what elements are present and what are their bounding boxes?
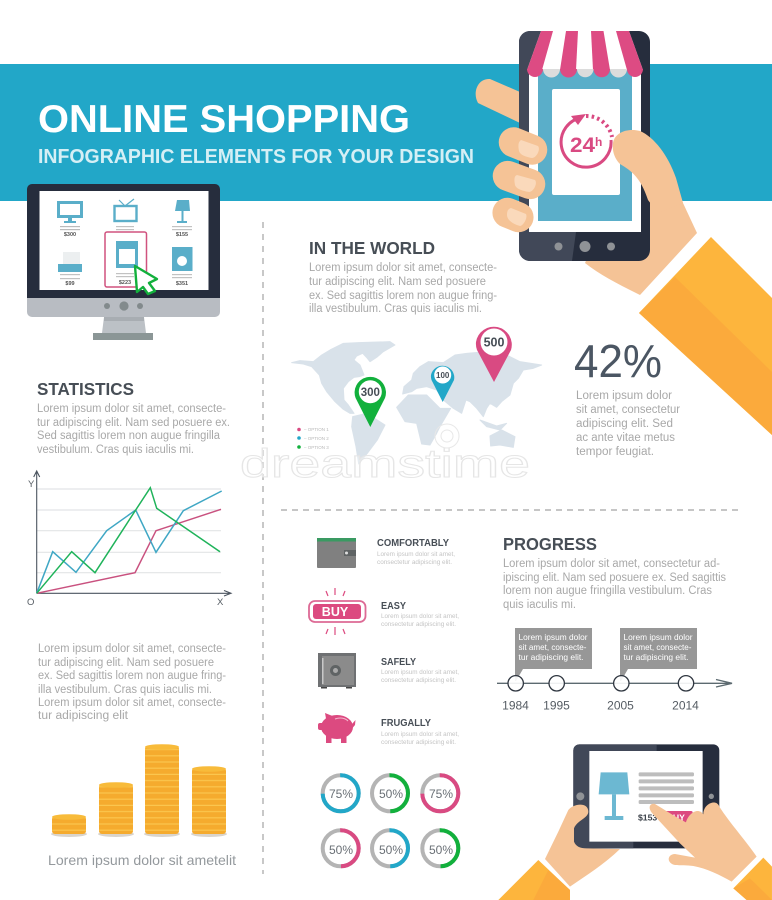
donut: 75% blue: 75% bbox=[329, 787, 353, 801]
price labels: $223 bbox=[119, 280, 131, 286]
pin: 500 bbox=[476, 327, 512, 382]
price labels: $155 bbox=[176, 232, 188, 238]
text block: progress: quis iaculis mi. bbox=[503, 599, 576, 611]
benefit: comfortably: COMFORTABLY bbox=[377, 538, 449, 549]
icon: buy button bbox=[309, 588, 366, 635]
callout: 1984: tur adipiscing elit. bbox=[518, 652, 584, 662]
benefit: easy: consectetur adipiscing elit. bbox=[381, 621, 456, 628]
right sleeve bbox=[733, 858, 772, 900]
pin: 300 bbox=[355, 377, 386, 427]
timeline years: 2014 bbox=[672, 698, 699, 712]
benefit: safely: Lorem ipsum dolor sit amet, bbox=[381, 669, 459, 676]
text block: in the world: illa vestibulum. Cras quis iaculis mi. bbox=[309, 303, 482, 315]
text block: 42%: ac ante vitae metus bbox=[576, 432, 675, 444]
axis labels: X bbox=[217, 597, 224, 608]
text block: statistics: tur adipiscing elit. Nam sed posuere ex. bbox=[37, 417, 230, 429]
shop awning bbox=[527, 31, 643, 78]
icon: wallet bbox=[317, 538, 356, 568]
icon: buy button: BUY bbox=[322, 605, 349, 619]
right hand bbox=[650, 802, 757, 882]
price labels: $99 bbox=[65, 281, 75, 287]
benefit: frugally: consectetur adipiscing elit. bbox=[381, 739, 456, 746]
icon: lamp product bbox=[175, 200, 190, 223]
text block: chart notes bbox=[38, 643, 226, 722]
text block: 42%: tempor feugiat. bbox=[576, 446, 654, 458]
series blue bbox=[37, 491, 222, 593]
heading: in the world: IN THE WORLD bbox=[309, 238, 435, 258]
benefit: frugally: FRUGALLY bbox=[381, 718, 431, 729]
map legend: – OPTION 2 bbox=[304, 436, 329, 441]
pin: 100 bbox=[431, 366, 454, 402]
text block: in the world: ex. Sed sagittis lorem non augue fring- bbox=[309, 290, 497, 302]
text block: 42%: adipiscing elit. Sed bbox=[576, 418, 673, 430]
coin stack 4 bbox=[192, 766, 226, 834]
tablet body bbox=[573, 744, 719, 848]
text block: statistics: Sed sagittis lorem non augue fringilla bbox=[37, 430, 221, 442]
text block: statistics: Lorem ipsum dolor sit amet, consecte- bbox=[37, 403, 226, 415]
benefit: frugally: Lorem ipsum dolor sit amet, bbox=[381, 731, 459, 738]
sleeve bbox=[639, 237, 772, 435]
text block: 42% bbox=[576, 390, 680, 458]
icon: washing machine product bbox=[172, 247, 192, 271]
text block: chart notes: illa vestibulum. Cras quis iaculis mi. bbox=[38, 684, 212, 696]
map legend: – OPTION 3 bbox=[304, 445, 329, 450]
text block: statistics bbox=[37, 403, 230, 456]
price labels: $300 bbox=[64, 232, 76, 238]
hand palm bbox=[585, 138, 697, 295]
benefit: safely: consectetur adipiscing elit. bbox=[381, 677, 456, 684]
timeline bbox=[497, 628, 732, 712]
timeline years bbox=[502, 698, 699, 712]
left sleeve bbox=[498, 860, 570, 900]
coin stack 1 bbox=[52, 814, 86, 834]
donut: 50% green: 50% bbox=[429, 843, 453, 857]
donut: 50% blue: 50% bbox=[379, 843, 403, 857]
buy button and price bbox=[638, 811, 693, 824]
coin stacks chart bbox=[51, 744, 227, 837]
pin: 100: 100 bbox=[436, 371, 450, 380]
buy button and price: $153 bbox=[638, 812, 657, 822]
icon: green cursor bbox=[135, 266, 157, 294]
map legend bbox=[297, 427, 329, 450]
heading: statistics: STATISTICS bbox=[37, 379, 134, 399]
vertical dashed divider bbox=[262, 222, 264, 874]
icon: safe bbox=[318, 653, 356, 688]
coin stack 2 bbox=[99, 782, 133, 834]
callout: 2005 bbox=[620, 628, 697, 681]
text block: in the world bbox=[309, 262, 497, 315]
subtitle: INFOGRAPHIC ELEMENTS FOR YOUR DESIGN bbox=[38, 146, 474, 168]
text block: in the world: tur adipiscing elit. Nam sed posuere bbox=[309, 276, 486, 288]
timeline years: 1984 bbox=[502, 698, 529, 712]
donut: 50% green: 50% bbox=[379, 787, 403, 801]
timeline arrow bbox=[497, 680, 732, 687]
price labels bbox=[64, 232, 188, 287]
pin: 500: 500 bbox=[484, 336, 504, 350]
buy button and price: BUY bbox=[667, 812, 685, 822]
horizontal dashed divider bbox=[281, 509, 739, 511]
series pink bbox=[37, 509, 221, 593]
benefit: frugally bbox=[318, 713, 459, 746]
text block: 42%: Lorem ipsum dolor bbox=[576, 390, 672, 402]
callout: 1984 bbox=[515, 628, 592, 681]
benefit: comfortably: Lorem ipsum dolor sit amet, bbox=[377, 551, 455, 558]
series green bbox=[37, 488, 220, 593]
benefit: safely: SAFELY bbox=[381, 657, 416, 668]
index finger bbox=[476, 79, 520, 123]
axis labels bbox=[27, 479, 224, 608]
axis labels: O bbox=[27, 597, 34, 608]
callout: 2005: sit amet, consecte- bbox=[624, 642, 692, 652]
text block: progress: lorem non augue fringilla vestibulum. Cras bbox=[503, 585, 712, 597]
icon: tv screen product bbox=[57, 201, 83, 230]
icon: piggy bank bbox=[318, 713, 356, 743]
text block: progress: ipiscing elit. Nam sed posuere ex. Sed sagittis bbox=[503, 572, 726, 584]
text block: 42%: sit amet, consectetur bbox=[576, 404, 680, 416]
world map bbox=[292, 327, 542, 464]
text block: chart notes: tur adipiscing elit bbox=[38, 710, 129, 722]
title: ONLINE SHOPPING bbox=[38, 98, 410, 141]
callout: 1984: Lorem ipsum dolor bbox=[518, 632, 588, 642]
benefit: easy bbox=[309, 588, 459, 635]
text block: chart notes: ex. Sed sagittis lorem non augue fring- bbox=[38, 670, 226, 682]
coin stack 3 bbox=[145, 744, 179, 834]
illustration: hands holding tablet bbox=[498, 744, 772, 900]
donut charts bbox=[323, 775, 458, 866]
benefit: comfortably: consectetur adipiscing elit. bbox=[377, 559, 452, 566]
price labels: $351 bbox=[176, 281, 188, 287]
benefit: comfortably bbox=[317, 538, 455, 568]
text block: progress bbox=[503, 558, 726, 611]
line chart bbox=[27, 471, 231, 608]
icon: retro tv product bbox=[114, 199, 136, 221]
timeline points bbox=[508, 676, 694, 691]
header band bbox=[0, 64, 772, 201]
left hand bbox=[545, 805, 620, 887]
donut: 75% pink: 75% bbox=[429, 787, 453, 801]
phone body bbox=[519, 31, 650, 261]
timeline years: 1995 bbox=[543, 698, 570, 712]
callout: 2005: tur adipiscing elit. bbox=[624, 652, 688, 662]
benefit: easy: Lorem ipsum dolor sit amet, bbox=[381, 613, 459, 620]
callout: 2005: Lorem ipsum dolor bbox=[624, 632, 693, 642]
illustration: hand holding phone bbox=[476, 31, 772, 435]
text block: chart notes: Lorem ipsum dolor sit amet, consecte- bbox=[38, 643, 226, 655]
product text lines bbox=[639, 772, 694, 804]
donut: 50% pink: 50% bbox=[329, 843, 353, 857]
axes bbox=[34, 471, 231, 596]
axis labels: Y bbox=[28, 479, 35, 490]
icon: printer product bbox=[58, 252, 82, 272]
24h clock icon: 24 bbox=[570, 134, 595, 157]
text block: statistics: vestibulum. Cras quis iaculis mi. bbox=[37, 444, 194, 456]
text block: progress: Lorem ipsum dolor sit amet, consectetur ad- bbox=[503, 558, 720, 570]
pin: 300: 300 bbox=[361, 387, 380, 399]
icon: oven product highlighted bbox=[105, 232, 146, 287]
benefit: easy: EASY bbox=[381, 601, 406, 612]
icon: desktop monitor with shop bbox=[27, 184, 220, 340]
heading: progress: PROGRESS bbox=[503, 534, 597, 554]
watermark: dreamstime bbox=[240, 442, 530, 486]
text block: chart notes: tur adipiscing elit. Nam sed posuere bbox=[38, 657, 214, 669]
benefit: safely bbox=[318, 653, 459, 688]
fingers on phone bbox=[488, 123, 552, 237]
lamp bbox=[599, 772, 629, 820]
text block: chart notes: Lorem ipsum dolor sit amet, consecte- bbox=[38, 697, 226, 709]
map legend: – OPTION 1 bbox=[304, 427, 329, 432]
thumb bbox=[613, 130, 683, 213]
watermark bbox=[240, 424, 530, 486]
24h clock icon bbox=[561, 114, 612, 167]
stat: 42%: 42% bbox=[574, 335, 662, 387]
24h clock icon: h bbox=[595, 135, 602, 149]
timeline years: 2005 bbox=[607, 698, 634, 712]
callout: 1984: sit amet, consecte- bbox=[518, 642, 587, 652]
coin caption: Lorem ipsum dolor sit ametelit bbox=[48, 852, 236, 868]
text block: in the world: Lorem ipsum dolor sit amet, consecte- bbox=[309, 262, 497, 274]
